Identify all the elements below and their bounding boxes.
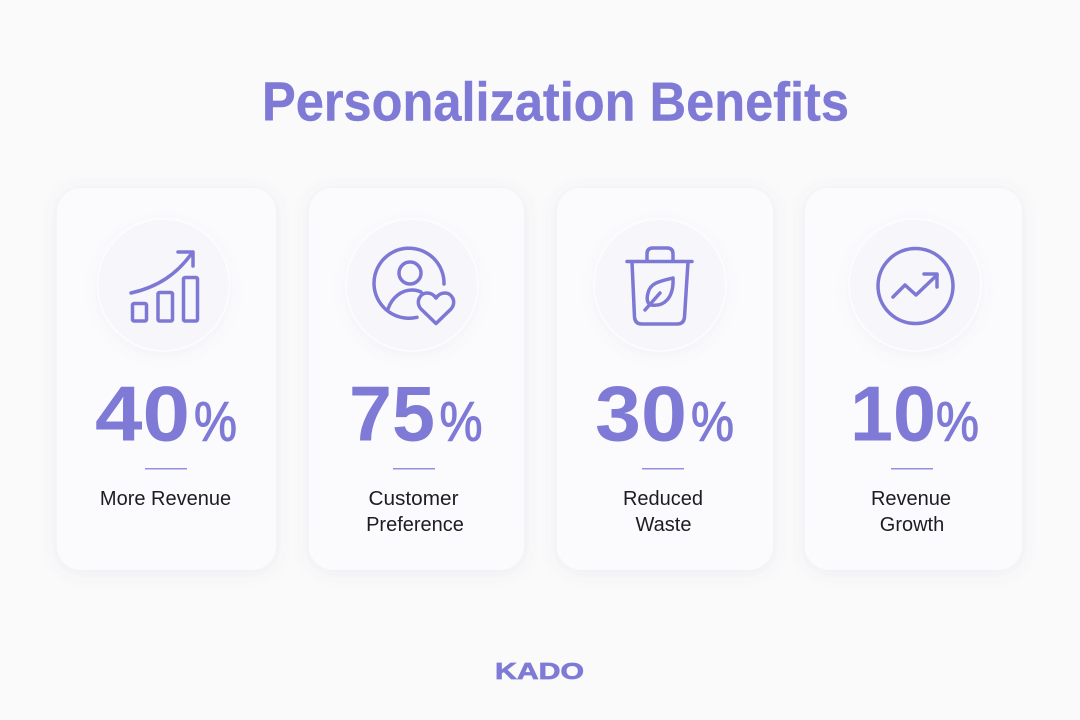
label: revenue growth: Revenue — [871, 488, 951, 510]
panel: 75% customer preference — [309, 188, 524, 570]
label: reduced waste: Reduced — [623, 488, 703, 510]
stat: 30%: % — [691, 390, 734, 452]
panel: 10% revenue growth — [805, 188, 1022, 570]
label: revenue growth: Growth — [880, 514, 944, 536]
icon: user with heart — [346, 219, 478, 351]
title: Personalization Benefits — [262, 70, 849, 132]
stat: 75% — [349, 370, 482, 458]
icon: bar chart with rising arrow — [98, 219, 230, 351]
stat: 30%: 30 — [595, 370, 687, 458]
logo: KADO: KADO — [495, 658, 584, 684]
panel: 30% reduced waste — [557, 188, 773, 570]
label: revenue growth — [871, 488, 951, 536]
label: customer preference: Preference — [366, 514, 464, 536]
stat: 75%: 75 — [349, 370, 435, 458]
stat: 10%: % — [936, 390, 979, 452]
panel: 40% more revenue — [57, 188, 276, 570]
stat: 10%: 10 — [850, 370, 936, 458]
stat: 30% — [595, 370, 734, 458]
stat: 40% — [95, 370, 237, 458]
label: reduced waste — [623, 488, 703, 536]
stat: 40%: % — [194, 390, 237, 452]
label: customer preference — [366, 488, 464, 536]
label: more revenue: More Revenue — [100, 488, 231, 510]
stat: 40%: 40 — [95, 370, 190, 458]
stat: 75%: % — [440, 390, 482, 452]
stat: 10% — [850, 370, 979, 458]
label: customer preference: Customer — [368, 488, 459, 510]
icon: trend arrow in circle — [849, 219, 981, 351]
label: reduced waste: Waste — [636, 514, 691, 536]
icon: bin with leaf — [594, 219, 726, 351]
